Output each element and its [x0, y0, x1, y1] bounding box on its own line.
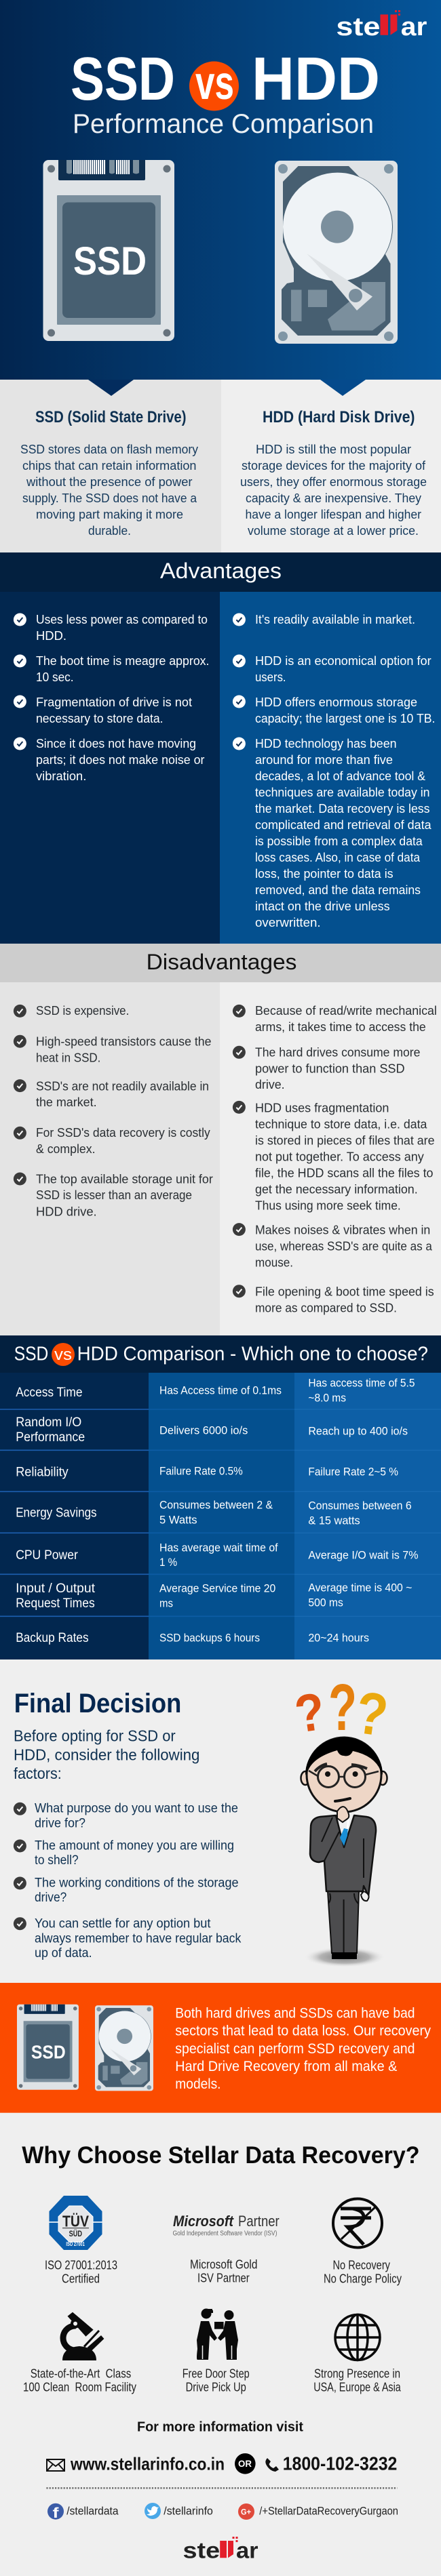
list: HDD advantages: decades, a lot of advance tool & [255, 769, 425, 783]
list: HDD disadvantages: use, whereas SSD's are quite as a [255, 1239, 433, 1253]
column: features: Input / Output [16, 1582, 96, 1596]
column: features: Performance [16, 1430, 85, 1445]
list: SSD disadvantages: & complex. [36, 1142, 95, 1156]
panel: HDD advantages [220, 592, 441, 944]
title: HDD [252, 45, 380, 113]
label: Microsoft: Microsoft Gold [190, 2257, 257, 2271]
heading: HDD: HDD (Hard Disk Drive) [263, 408, 415, 426]
list: HDD advantages: It's readily available in market. [255, 613, 415, 626]
list: HDD advantages: is possible from a complex data [255, 834, 423, 848]
title: vs [195, 56, 234, 109]
list: HDD disadvantages: drive. [255, 1078, 285, 1091]
heading: Disadvantages: Disadvantages [147, 950, 296, 974]
list: SSD disadvantages: heat in SSD. [36, 1051, 100, 1064]
list: SSD disadvantages: SSD is lesser than an average [36, 1188, 192, 1202]
icon: microscope [62, 2312, 104, 2360]
panel: SSD advantages [0, 592, 220, 944]
label: door step [183, 2367, 250, 2394]
badge: Microsoft Partner: Microsoft [173, 2213, 235, 2230]
label: microscope: State-of-the-Art Class [31, 2367, 131, 2380]
text: recovery message: sectors that lead to data loss. Our recovery [175, 2024, 431, 2039]
list: HDD disadvantages: arms, it takes time to access the [255, 1020, 426, 1034]
column: features: Access Time [16, 1386, 83, 1400]
list: SSD disadvantages: SSD is expensive. [36, 1004, 129, 1018]
text: HDD description: capacity & are inexpensive. They [246, 491, 421, 505]
list: HDD disadvantages: get the necessary information. [255, 1182, 418, 1196]
column: HDD values: Average time is 400 ~ [308, 1581, 412, 1594]
question marks: ? [291, 1681, 328, 1744]
logo: stellar bottom: ar [236, 2537, 258, 2562]
column: features: Request Times [16, 1596, 95, 1611]
panel: HDD description [221, 380, 441, 552]
heading: comparison: SSD [14, 1344, 48, 1365]
text: recovery message: specialist can perform SSD recovery and [175, 2041, 415, 2057]
heading: comparison: HDD Comparison - Which one to choose? [77, 1344, 428, 1365]
heading: Advantages: Advantages [160, 559, 282, 583]
list: HDD advantages [255, 613, 435, 929]
list: final factors: The working conditions of the storage [35, 1876, 239, 1890]
social: twitter: /stellarinfo [164, 2504, 213, 2517]
heading: Final Decision: Final Decision [14, 1689, 181, 1718]
text: SSD description: durable. [88, 524, 131, 538]
list: HDD advantages: the market. Data recovery is less [255, 802, 430, 816]
list: HDD advantages: overwritten. [255, 916, 321, 929]
heading: SSD: SSD (Solid State Drive) [35, 408, 186, 426]
list: HDD disadvantages: is stored in pieces of files that are [255, 1133, 434, 1147]
column: HDD values: Failure Rate 2~5 % [308, 1465, 398, 1478]
icon: mini HDD [95, 2005, 153, 2091]
list: HDD disadvantages: The hard drives consume more [255, 1045, 420, 1059]
check icons [233, 1005, 246, 1297]
list: SSD advantages: The boot time is meagre approx. [36, 654, 209, 668]
title: SSD [71, 45, 175, 113]
column: SSD values: Failure Rate 0.5% [159, 1464, 243, 1477]
heading: comparison: vs [54, 1346, 72, 1364]
head [301, 1771, 309, 1785]
column: SSD values: Average Service time 20 [159, 1582, 275, 1594]
badge: Microsoft Partner: Partner [238, 2213, 280, 2230]
text: HDD description: users, they offer enormous storage [240, 475, 427, 489]
label: no recovery [324, 2258, 402, 2285]
website: www.stellarinfo.co.in [70, 2453, 225, 2474]
icon: envelope [47, 2459, 64, 2471]
column: SSD values [159, 1384, 282, 1644]
label: no recovery: No Charge Policy [324, 2272, 402, 2285]
text: HDD description [240, 443, 427, 538]
label: door step: Free Door Step [183, 2367, 250, 2380]
icon: SSD drive [43, 160, 174, 341]
list: HDD disadvantages: HDD uses fragmentation [255, 1101, 389, 1114]
pointer: SSD [88, 380, 134, 396]
list: HDD disadvantages [255, 1004, 437, 1314]
badge: TUV ISO: TÜV [62, 2212, 90, 2230]
text: HDD description: storage devices for the majority of [242, 459, 426, 472]
title [71, 45, 380, 113]
list: SSD disadvantages [36, 1004, 213, 1218]
check icons [14, 1005, 26, 1185]
column: HDD values: & 15 watts [308, 1514, 360, 1527]
logo: stellar bottom: ste [183, 2537, 220, 2562]
social: facebook [47, 2503, 119, 2521]
question marks: ? [351, 1678, 392, 1749]
list: final factors: up of data. [35, 1946, 92, 1960]
column: features: Random I/O [16, 1415, 81, 1430]
label: ISO: Certified [62, 2272, 100, 2285]
badge: OR [235, 2453, 256, 2474]
list: HDD disadvantages: Makes noises & vibrates when in [255, 1223, 430, 1236]
label: Microsoft [190, 2257, 257, 2285]
column: SSD values: 1 % [159, 1556, 177, 1569]
list: HDD disadvantages: Thus using more seek time. [255, 1199, 401, 1213]
icon: SSD drive: SSD [73, 239, 147, 283]
list: SSD advantages [36, 613, 209, 783]
label: globe [313, 2367, 402, 2394]
list: HDD advantages: techniques are available today in [255, 786, 430, 799]
text: HDD description: HDD is still the most popular [256, 443, 411, 456]
question marks [291, 1670, 392, 1749]
text: SSD description: moving part making it more [36, 508, 183, 521]
jacket [310, 1815, 376, 1896]
list: HDD disadvantages: mouse. [255, 1255, 293, 1269]
heading: Advantages [0, 552, 441, 592]
list: HDD disadvantages: Because of read/write mechanical [255, 1004, 437, 1018]
column: features: CPU Power [16, 1548, 78, 1563]
column: SSD values: Has average wait time of [159, 1541, 278, 1554]
list: SSD advantages: Since it does not have moving [36, 737, 196, 750]
badge: OR: OR [238, 2458, 252, 2469]
label: ISO: ISO 27001:2013 [45, 2258, 117, 2272]
text: recovery message [175, 2006, 431, 2092]
column: HDD values [308, 1376, 418, 1644]
check icons: final [14, 1803, 26, 1930]
list: SSD advantages: HDD. [36, 629, 66, 643]
text: final intro: factors: [14, 1765, 62, 1782]
column: SSD values: Consumes between 2 & [159, 1498, 273, 1511]
social: facebook: /stellardata [66, 2504, 119, 2517]
label: Microsoft: ISV Partner [197, 2271, 250, 2285]
subtitle: Performance Comparison [73, 109, 374, 139]
text: final intro: Before opting for SSD or [14, 1727, 176, 1744]
social: google plus: G+ [241, 2507, 251, 2516]
logo: stellar top: ar [401, 13, 427, 41]
list: SSD disadvantages: HDD drive. [36, 1205, 97, 1218]
text: final intro: HDD, consider the following [14, 1746, 199, 1763]
text: SSD description: SSD stores data on flash memory [20, 443, 198, 456]
list: final factors: drive? [35, 1891, 66, 1905]
list: HDD disadvantages: power to function than SSD [255, 1062, 405, 1075]
list: final factors: You can settle for any option but [35, 1916, 211, 1931]
text: final intro [14, 1727, 199, 1782]
column: HDD values: 500 ms [308, 1596, 343, 1609]
column: SSD values: Has Access time of 0.1ms [159, 1384, 282, 1396]
badge: Microsoft Partner: Gold Independent Software Vendor (ISV) [173, 2230, 277, 2237]
column: features: Reliability [16, 1465, 69, 1479]
check icons [233, 613, 246, 750]
legs [328, 1891, 359, 1953]
phone number: 1800-102-3232 [283, 2453, 397, 2474]
label: no recovery: No Recovery [332, 2258, 390, 2272]
label: microscope: 100 Clean Room Facility [23, 2380, 136, 2394]
list: HDD disadvantages: file, the HDD scans all the files to [255, 1166, 433, 1180]
text: HDD description: have a longer lifespan and higher [246, 508, 421, 521]
illustration: thinking man [291, 1670, 392, 1967]
table: comparison [0, 1373, 441, 1659]
list: final factors: The amount of money you are willing [35, 1838, 234, 1853]
panel: orange callout [0, 1983, 441, 2113]
badge: TUV ISO [49, 2196, 102, 2250]
icon: phone [265, 2458, 279, 2472]
list: HDD advantages: loss cases. Also, in case of data [255, 851, 421, 864]
list: SSD advantages: parts; it does not make noise or [36, 753, 205, 767]
badge: Microsoft Partner [173, 2213, 280, 2237]
list: HDD advantages: complicated and retrieval of data [255, 818, 432, 832]
list: final factors [35, 1801, 242, 1960]
list: SSD disadvantages: the market. [36, 1095, 97, 1109]
logo: stellar top: ste [336, 13, 380, 41]
list: SSD disadvantages: High-speed transistors cause the [36, 1034, 211, 1048]
column: SSD values: SSD backups 6 hours [159, 1631, 260, 1644]
logo: stellar top [336, 10, 427, 41]
social: twitter [145, 2503, 213, 2519]
column: features [16, 1386, 97, 1645]
column: HDD values: Consumes between 6 [308, 1499, 412, 1512]
list: SSD disadvantages: For SSD's data recovery is costly [36, 1126, 210, 1140]
list: HDD advantages: loss, the pointer to data is [255, 867, 394, 881]
column: features: Backup Rates [16, 1631, 89, 1645]
icon: mini SSD: SSD [31, 2041, 66, 2062]
badge: TUV ISO: ISO 27001 [66, 2241, 85, 2247]
social: facebook: f [53, 2505, 60, 2521]
check icons [14, 613, 26, 750]
list: final factors: always remember to have regular back [35, 1931, 242, 1946]
panel: SSD disadvantages [0, 982, 220, 1335]
list: HDD disadvantages: File opening & boot time speed is [255, 1285, 434, 1299]
pointer: HDD [320, 380, 366, 396]
tie [340, 1817, 349, 1846]
list: final factors: drive for? [35, 1816, 85, 1830]
list: SSD advantages: necessary to store data. [36, 712, 163, 725]
list: SSD advantages: vibration. [36, 769, 86, 783]
list: SSD advantages: Uses less power as compared to [36, 613, 208, 626]
text: SSD description [20, 443, 198, 538]
text: more information: For more information visit [137, 2420, 303, 2435]
heading: Disadvantages [0, 944, 441, 982]
list: SSD advantages: 10 sec. [36, 670, 74, 684]
icon: globe [335, 2314, 380, 2360]
icon: door step delivery [197, 2309, 238, 2360]
heading: comparison [0, 1335, 441, 1373]
text: SSD description: supply. The SSD does not have a [22, 491, 197, 505]
list: HDD advantages: HDD technology has been [255, 737, 397, 750]
panel: SSD description [0, 380, 221, 552]
panel: HDD disadvantages [220, 982, 441, 1335]
list: HDD advantages: removed, and the data remains [255, 883, 421, 897]
column: HDD values: Average I/O wait is 7% [308, 1548, 418, 1561]
label: globe: Strong Presence in [314, 2367, 400, 2380]
column: features: Energy Savings [16, 1506, 97, 1520]
list: HDD advantages: capacity; the largest one is 10 TB. [255, 712, 435, 725]
column: HDD values: Has access time of 5.5 [308, 1376, 415, 1389]
list: HDD advantages: intact on the drive unless [255, 900, 390, 913]
text: HDD description: volume storage at a lower price. [248, 524, 419, 538]
label: door step: Drive Pick Up [186, 2380, 246, 2394]
column: HDD values: ~8.0 ms [308, 1391, 346, 1404]
list: HDD disadvantages: not put together. To access any [255, 1150, 424, 1164]
list: HDD disadvantages: technique to store data, i.e. data [255, 1117, 427, 1131]
list: SSD advantages: Fragmentation of drive is not [36, 696, 192, 709]
social: google plus: /+StellarDataRecoveryGurgaon [259, 2504, 398, 2517]
hand [337, 1807, 349, 1822]
list: final factors: What purpose do you want to use the [35, 1801, 238, 1815]
face [318, 1767, 339, 1787]
label: globe: USA, Europe & Asia [313, 2380, 402, 2394]
contact row [47, 2453, 397, 2474]
column: SSD values: Delivers 6000 io/s [159, 1424, 248, 1436]
panel: hero [0, 0, 441, 380]
list: HDD advantages: users. [255, 670, 286, 684]
text: SSD description: without the presence of power [26, 475, 192, 489]
icon: no rupee [333, 2199, 382, 2248]
list: HDD advantages: HDD is an economical option for [255, 654, 432, 668]
list: SSD disadvantages: The top available storage unit for [36, 1173, 213, 1186]
list: HDD advantages: around for more than five [255, 753, 393, 767]
text: recovery message: Hard Drive Recovery from all make & [175, 2059, 397, 2074]
text: recovery message: Both hard drives and SSDs can have bad [175, 2006, 415, 2021]
column: HDD values: Reach up to 400 io/s [308, 1424, 408, 1437]
list: HDD advantages: HDD offers enormous storage [255, 696, 417, 709]
icon: HDD drive [275, 161, 398, 344]
text: SSD description: chips that can retain information [22, 459, 197, 472]
social: google plus [238, 2503, 398, 2520]
question marks: ? [328, 1670, 357, 1744]
heading: Why Choose: Why Choose Stellar Data Recovery? [22, 2142, 420, 2169]
icon: mini SSD [17, 2005, 79, 2090]
label: ISO [45, 2258, 117, 2285]
column: SSD values: 5 Watts [159, 1513, 197, 1526]
list: final factors: to shell? [35, 1853, 79, 1868]
list: HDD disadvantages: more as compared to SSD. [255, 1301, 397, 1314]
text: recovery message: models. [175, 2076, 221, 2092]
badge: TUV ISO: SÜD [69, 2228, 82, 2238]
label: microscope [23, 2367, 136, 2394]
column: SSD values: ms [159, 1596, 173, 1609]
logo: stellar bottom [183, 2537, 258, 2562]
column: HDD values: 20~24 hours [308, 1631, 369, 1644]
list: SSD disadvantages: SSD's are not readily available in [36, 1079, 209, 1093]
